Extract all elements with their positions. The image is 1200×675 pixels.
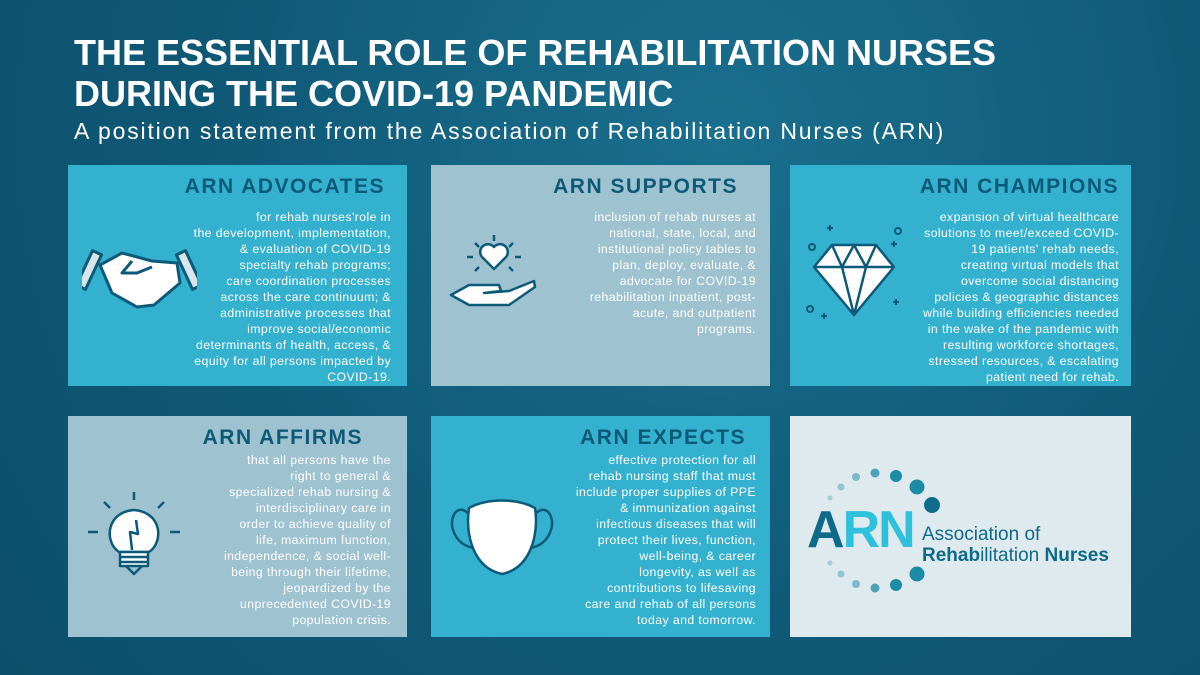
text: longevity, as well as xyxy=(639,565,756,579)
subtitle: A position statement from the Association of Rehabilitation Nurses (ARN) xyxy=(74,118,945,144)
text: independence, & social well- xyxy=(224,549,391,563)
text: rehab nursing staff that must xyxy=(589,469,756,483)
text xyxy=(923,210,1119,384)
text: & evaluation of COVID-19 xyxy=(240,242,391,256)
text: administrative processes that xyxy=(220,306,391,320)
logo name xyxy=(922,524,1109,566)
icon: handshake xyxy=(82,249,197,308)
logo ARN letters: ARN xyxy=(807,501,914,559)
text: jeopardized by the xyxy=(283,581,391,595)
text: right to general & xyxy=(290,469,391,483)
panel: supports xyxy=(431,165,770,386)
panel: expects xyxy=(431,416,770,637)
logo name: Association of xyxy=(922,524,1040,545)
text: plan, deploy, evaluate, & xyxy=(612,258,756,272)
text xyxy=(576,453,756,627)
text: rehabilitation inpatient, post- xyxy=(590,290,756,304)
text: while building efficiencies needed xyxy=(923,306,1119,320)
text: population crisis. xyxy=(292,613,391,627)
text: include proper supplies of PPE xyxy=(576,485,756,499)
icon: mask xyxy=(450,499,554,576)
text: patient need for rehab. xyxy=(986,370,1119,384)
text: the development, implementation, xyxy=(194,226,391,240)
text: specialty rehab programs; xyxy=(240,258,391,272)
text: COVID-19. xyxy=(327,370,391,384)
text: effective protection for all xyxy=(608,453,756,467)
text: 19 patients' rehab needs, xyxy=(971,242,1119,256)
text: interdisciplinary care in xyxy=(256,501,391,515)
heading: ARN EXPECTS xyxy=(580,426,746,449)
icon: lightbulb xyxy=(88,492,180,576)
text: across the care continuum; & xyxy=(221,290,391,304)
text: programs. xyxy=(697,322,756,336)
text: improve social/economic xyxy=(247,322,391,336)
heading: ARN AFFIRMS xyxy=(203,426,363,449)
logo name: Rehabilitation Nurses xyxy=(922,545,1109,566)
text: creating virtual models that xyxy=(961,258,1119,272)
text: & immunization against xyxy=(620,501,756,515)
text: expansion of virtual healthcare xyxy=(940,210,1119,224)
logo dots xyxy=(828,468,940,592)
text: equity for all persons impacted by xyxy=(194,354,391,368)
text: specialized rehab nursing & xyxy=(229,485,391,499)
heading: ARN ADVOCATES xyxy=(185,175,385,198)
text: resulting workforce shortages, xyxy=(943,338,1119,352)
text xyxy=(194,210,391,384)
text: inclusion of rehab nurses at xyxy=(594,210,756,224)
icon: heart in hand xyxy=(450,235,536,306)
text: contributions to lifesaving xyxy=(607,581,756,595)
text: acute, and outpatient xyxy=(633,306,756,320)
heading: ARN CHAMPIONS xyxy=(920,175,1119,198)
text: policies & geographic distances xyxy=(934,290,1119,304)
text: care and rehab of all persons xyxy=(585,597,756,611)
text: that all persons have the xyxy=(247,453,391,467)
text: stressed resources, & escalating xyxy=(928,354,1119,368)
text: for rehab nurses'role in xyxy=(256,210,391,224)
panel: affirms xyxy=(68,416,407,637)
text xyxy=(224,453,391,627)
text: protect their lives, function, xyxy=(598,533,756,547)
text: infectious diseases that will xyxy=(596,517,756,531)
title: THE ESSENTIAL ROLE OF REHABILITATION NURSES xyxy=(74,32,996,73)
text xyxy=(590,210,756,336)
title xyxy=(74,32,996,114)
text: today and tomorrow. xyxy=(637,613,756,627)
text: care coordination processes xyxy=(226,274,391,288)
heading: ARN SUPPORTS xyxy=(553,175,738,198)
icon: diamond xyxy=(806,225,902,319)
text: order to achieve quality of xyxy=(239,517,391,531)
panel: ARN logo xyxy=(790,416,1131,637)
text: determinants of health, access, & xyxy=(196,338,391,352)
panel: advocates xyxy=(68,165,407,386)
text: life, maximum function, xyxy=(256,533,391,547)
text: overcome social distancing xyxy=(961,274,1119,288)
text: national, state, local, and xyxy=(609,226,756,240)
text: in the wake of the pandemic with xyxy=(928,322,1119,336)
panel: champions xyxy=(790,165,1131,386)
text: being through their lifetime, xyxy=(231,565,391,579)
title: DURING THE COVID-19 PANDEMIC xyxy=(74,73,673,114)
text: solutions to meet/exceed COVID- xyxy=(924,226,1119,240)
text: institutional policy tables to xyxy=(598,242,756,256)
text: unprecedented COVID-19 xyxy=(240,597,391,611)
text: advocate for COVID-19 xyxy=(620,274,756,288)
text: well-being, & career xyxy=(639,549,756,563)
